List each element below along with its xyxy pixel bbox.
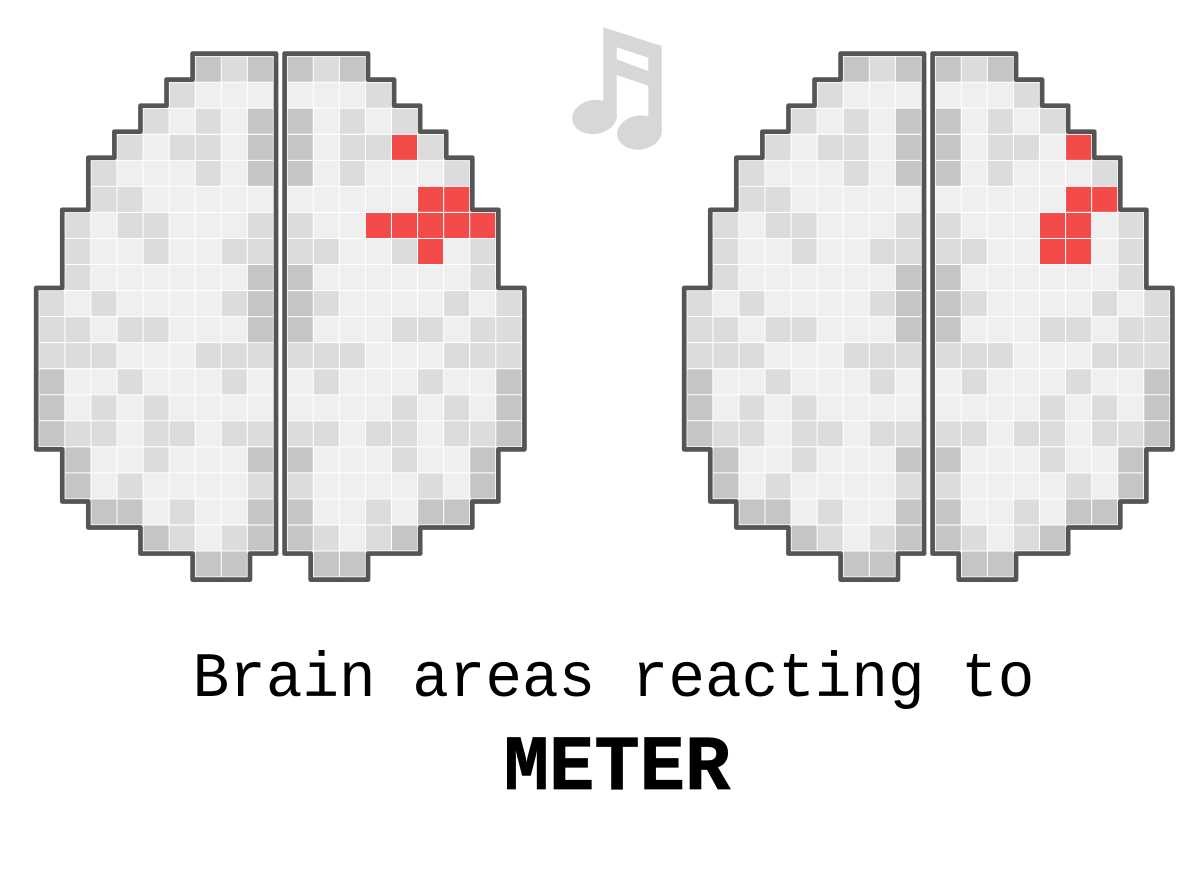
- hemisphere base fill: [933, 54, 1172, 580]
- medium activity cells: [687, 56, 921, 551]
- heading: METER: METER: [504, 725, 730, 813]
- hemisphere outline: [684, 54, 924, 580]
- hemisphere outline: [933, 54, 1172, 580]
- red active area: [1039, 134, 1118, 265]
- hemisphere base fill: [36, 54, 276, 580]
- caption line: Brain areas reacting to: [193, 643, 1034, 715]
- right brain: right hemisphere: [933, 54, 1172, 580]
- low-signal dark cells: [39, 56, 273, 577]
- low-signal dark cells: [287, 56, 522, 577]
- icon: music notes: [570, 27, 664, 152]
- low-signal dark cells: [935, 56, 1170, 577]
- left brain: right hemisphere: [285, 54, 524, 580]
- left brain: left hemisphere: [36, 54, 276, 580]
- hemisphere outline: [285, 54, 524, 580]
- hemisphere outline: [36, 54, 276, 580]
- medium activity cells: [287, 56, 522, 551]
- medium activity cells: [39, 56, 273, 551]
- red active area: [365, 134, 496, 265]
- brain map: right brain: [684, 54, 1172, 580]
- hemisphere base fill: [684, 54, 924, 580]
- low-signal dark cells: [687, 56, 921, 577]
- hemisphere base fill: [285, 54, 524, 580]
- right brain: left hemisphere: [684, 54, 924, 580]
- brain map: left brain: [36, 54, 524, 580]
- medium activity cells: [935, 56, 1170, 551]
